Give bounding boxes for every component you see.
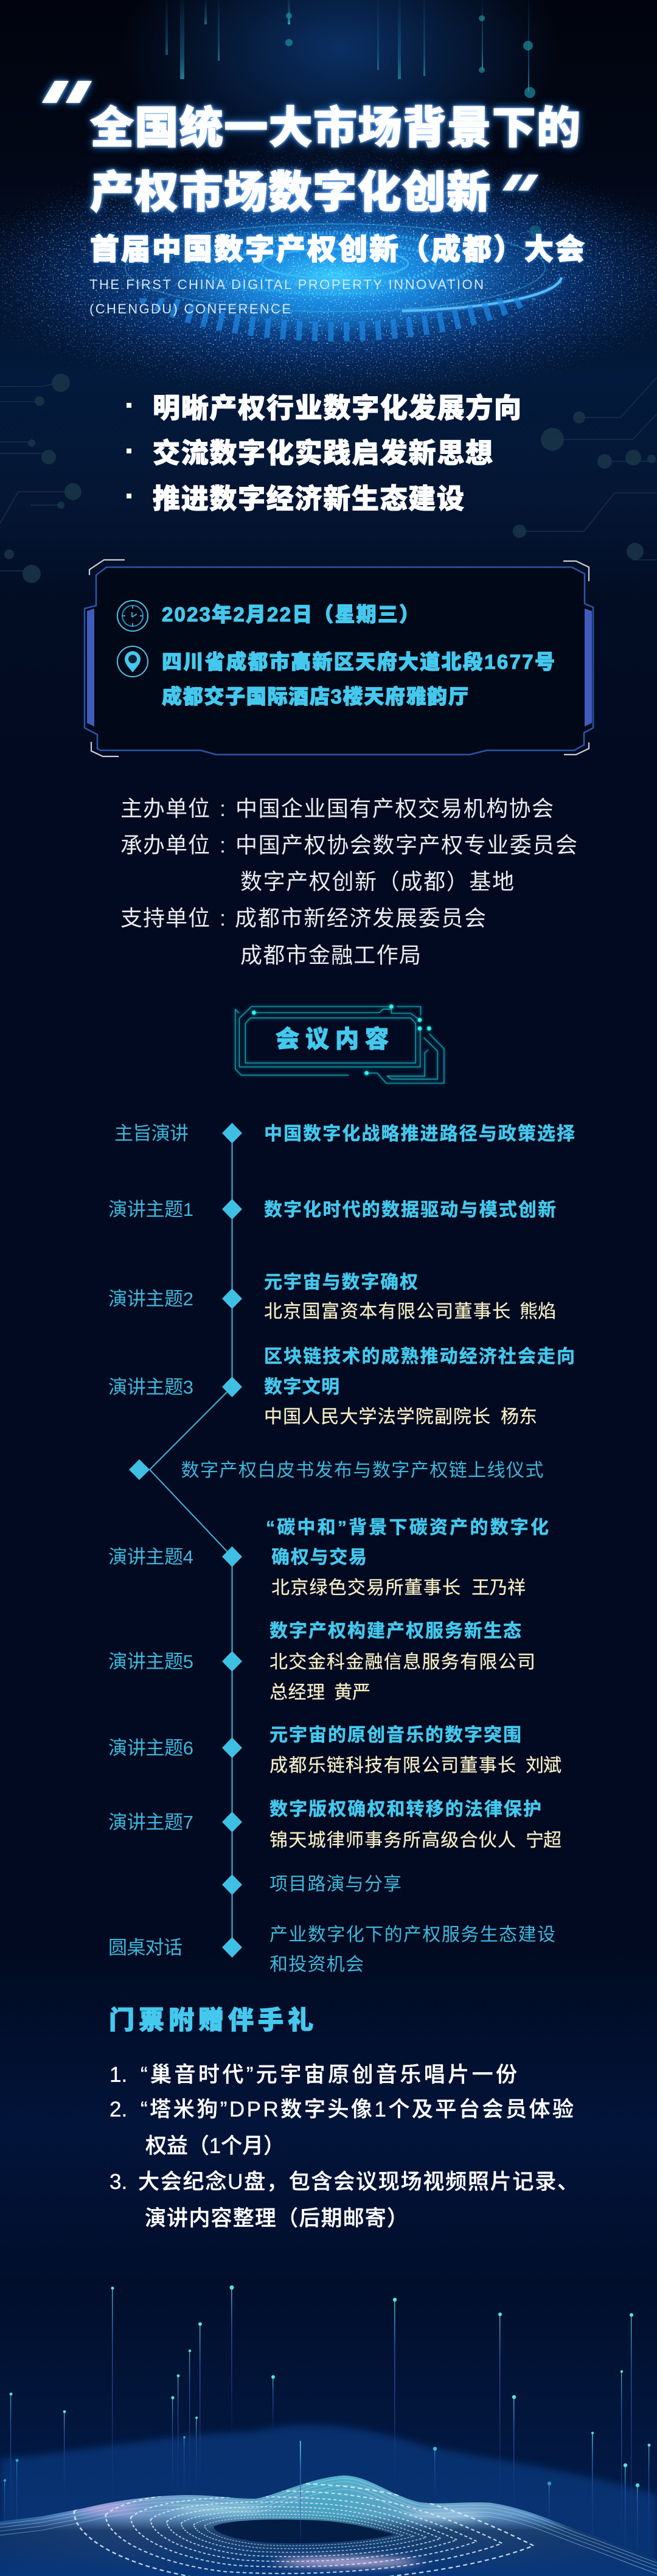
title line 2: 产权市场数字化创新 <box>90 169 490 217</box>
agenda: topic 5: 黄严 <box>334 1683 370 1703</box>
gift 2: “塔米狗”DPR数字头像1个及平台会员体验 <box>141 2098 574 2121</box>
gift 3 <box>109 2170 579 2230</box>
title block <box>42 81 580 217</box>
supporter: 支持单位 <box>120 906 210 930</box>
gift 1: “巢音时代”元宇宙原创音乐唱片一份 <box>141 2063 517 2087</box>
contour rings <box>74 2482 534 2576</box>
footer: data wave landscape <box>0 2425 657 2576</box>
highlights <box>75 2504 482 2566</box>
agenda: topic 4: 王乃祥 <box>471 1578 526 1598</box>
host: 主办单位 <box>120 796 210 821</box>
agenda: topic 7: 演讲主题7 <box>108 1812 193 1833</box>
agenda: topic 7: 宁超 <box>526 1831 561 1851</box>
organizers <box>120 796 577 968</box>
badge label: 会议内容 <box>276 1027 389 1053</box>
agenda: topic 2: 元宇宙与数字确权 <box>264 1272 418 1293</box>
supporter: : <box>220 906 226 930</box>
gift 1: 1. <box>109 2063 127 2087</box>
contour bands <box>0 2478 657 2574</box>
agenda: topic 3: 数字文明 <box>264 1377 339 1397</box>
heading: ticket gifts: 门票附赠伴手礼 <box>109 2006 313 2034</box>
gift 2 <box>109 2098 574 2158</box>
bullet point 2: 交流数字化实践启发新思想 <box>153 438 493 469</box>
gift 3: 大会纪念U盘，包含会议现场视频照片记录、 <box>138 2170 579 2194</box>
host: 中国企业国有产权交易机构协会 <box>235 796 554 821</box>
date text: 2023年2月22日（星期三） <box>162 603 419 626</box>
footer: light rays <box>4 2286 650 2564</box>
agenda: keynote <box>114 1123 575 1144</box>
agenda: topic 2 <box>108 1272 556 1322</box>
agenda: topic 5: 北交金科金融信息服务有限公司 <box>269 1652 535 1672</box>
wave center hollow <box>214 2519 394 2543</box>
panel: date and venue <box>85 560 593 756</box>
organizer: 中国产权协会数字产权专业委员会 <box>235 832 577 857</box>
icon: opening quote mark <box>42 81 92 103</box>
host: : <box>220 796 226 821</box>
agenda: topic 5: 数字产权构建产权服务新生态 <box>269 1621 521 1641</box>
english subtitle: THE FIRST CHINA DIGITAL PROPERTY INNOVATION <box>89 277 484 292</box>
gift 3: 3. <box>109 2170 127 2194</box>
agenda: roundtable: 和投资机会 <box>269 1955 364 1975</box>
organizer: : <box>220 832 226 857</box>
panel frame <box>85 560 593 756</box>
agenda: topic 6: 演讲主题6 <box>108 1737 193 1759</box>
agenda: topic 4: 演讲主题4 <box>108 1546 193 1568</box>
supporter <box>120 906 486 968</box>
front ray <box>300 2441 301 2554</box>
english subtitle <box>89 277 484 316</box>
agenda: topic 3 <box>108 1347 575 1427</box>
venue text: 成都交子国际酒店3楼天府雅韵厅 <box>162 685 468 708</box>
agenda: topic 2: 熊焰 <box>520 1302 556 1322</box>
agenda: project roadshow: 项目路演与分享 <box>269 1874 401 1894</box>
agenda: roundtable <box>108 1925 555 1975</box>
agenda: topic 3: 演讲主题3 <box>108 1377 193 1398</box>
icon: closing quote mark <box>502 175 538 190</box>
agenda: topic 5 <box>108 1621 535 1703</box>
agenda: roundtable: 产业数字化下的产权服务生态建设 <box>269 1925 555 1945</box>
agenda: topic 2: 北京国富资本有限公司董事长 <box>264 1302 510 1322</box>
gift list <box>109 2063 579 2230</box>
agenda: topic 1: 演讲主题1 <box>108 1199 193 1220</box>
agenda: keynote: 主旨演讲 <box>114 1123 189 1144</box>
agenda timeline <box>108 1123 575 1975</box>
title line 1: 全国统一大市场背景下的 <box>90 104 580 153</box>
badge circuit frame <box>235 1005 444 1083</box>
agenda: topic 1: 数字化时代的数据驱动与模式创新 <box>264 1200 556 1220</box>
hill silhouette <box>0 2476 657 2576</box>
agenda: keynote: 中国数字化战略推进路径与政策选择 <box>264 1124 575 1144</box>
gift 2: 权益（1个月） <box>145 2134 285 2158</box>
agenda: topic 4 <box>108 1518 549 1598</box>
agenda: topic 5: 演讲主题5 <box>108 1651 193 1672</box>
supporter: 成都市金融工作局 <box>240 943 421 968</box>
timeline line and diamonds <box>129 1123 242 1958</box>
agenda: roundtable: 圆桌对话 <box>108 1937 182 1958</box>
circuit pattern background <box>0 374 657 583</box>
agenda: topic 3: 杨东 <box>501 1407 537 1427</box>
agenda: topic 4: “碳中和”背景下碳资产的数字化 <box>266 1518 549 1538</box>
supporter: 成都市新经济发展委员会 <box>235 906 486 930</box>
organizer: 承办单位 <box>120 832 210 857</box>
english subtitle: (CHENGDU) CONFERENCE <box>89 301 291 316</box>
organizer: 数字产权创新（成都）基地 <box>240 869 514 894</box>
venue text: 四川省成都市高新区天府大道北段1677号 <box>162 651 555 673</box>
agenda: topic 2: 演讲主题2 <box>108 1288 193 1310</box>
header background: digital core <box>0 0 657 426</box>
agenda: topic 5: 总经理 <box>269 1683 325 1703</box>
agenda: topic 7: 锦天城律师事务所高级合伙人 <box>269 1831 516 1851</box>
agenda: topic 6: 元宇宙的原创音乐的数字突围 <box>269 1725 521 1745</box>
agenda: topic 7 <box>108 1799 561 1851</box>
agenda: topic 3: 区块链技术的成熟推动经济社会走向 <box>264 1347 575 1367</box>
key points list <box>127 393 521 514</box>
bullet point 1: 明晰产权行业数字化发展方向 <box>153 393 521 424</box>
agenda: topic 7: 数字版权确权和转移的法律保护 <box>269 1799 541 1820</box>
agenda: topic 6: 成都乐链科技有限公司董事长 <box>269 1756 516 1776</box>
agenda: topic 4: 确权与交易 <box>271 1548 367 1568</box>
agenda: topic 6: 刘斌 <box>526 1756 561 1776</box>
section badge: agenda <box>235 1005 444 1083</box>
icon: location pin <box>117 646 148 677</box>
agenda: topic 1 <box>108 1199 556 1220</box>
gift 3: 演讲内容整理（后期邮寄） <box>145 2207 408 2230</box>
agenda: topic 6 <box>108 1725 561 1776</box>
venue text <box>162 651 555 708</box>
bullet point 3: 推进数字经济新生态建设 <box>153 483 464 514</box>
icon: clock <box>117 601 148 631</box>
agenda: topic 4: 北京绿色交易所董事长 <box>271 1578 461 1598</box>
gift 2: 2. <box>109 2098 127 2121</box>
agenda: topic 3: 中国人民大学法学院副院长 <box>264 1407 490 1427</box>
subtitle: conference name: 首届中国数字产权创新（成都）大会 <box>90 233 585 266</box>
distant hill <box>0 2425 657 2576</box>
agenda: white paper ceremony: 数字产权白皮书发布与数字产权链上线仪式 <box>181 1461 544 1481</box>
organizer <box>120 832 577 894</box>
